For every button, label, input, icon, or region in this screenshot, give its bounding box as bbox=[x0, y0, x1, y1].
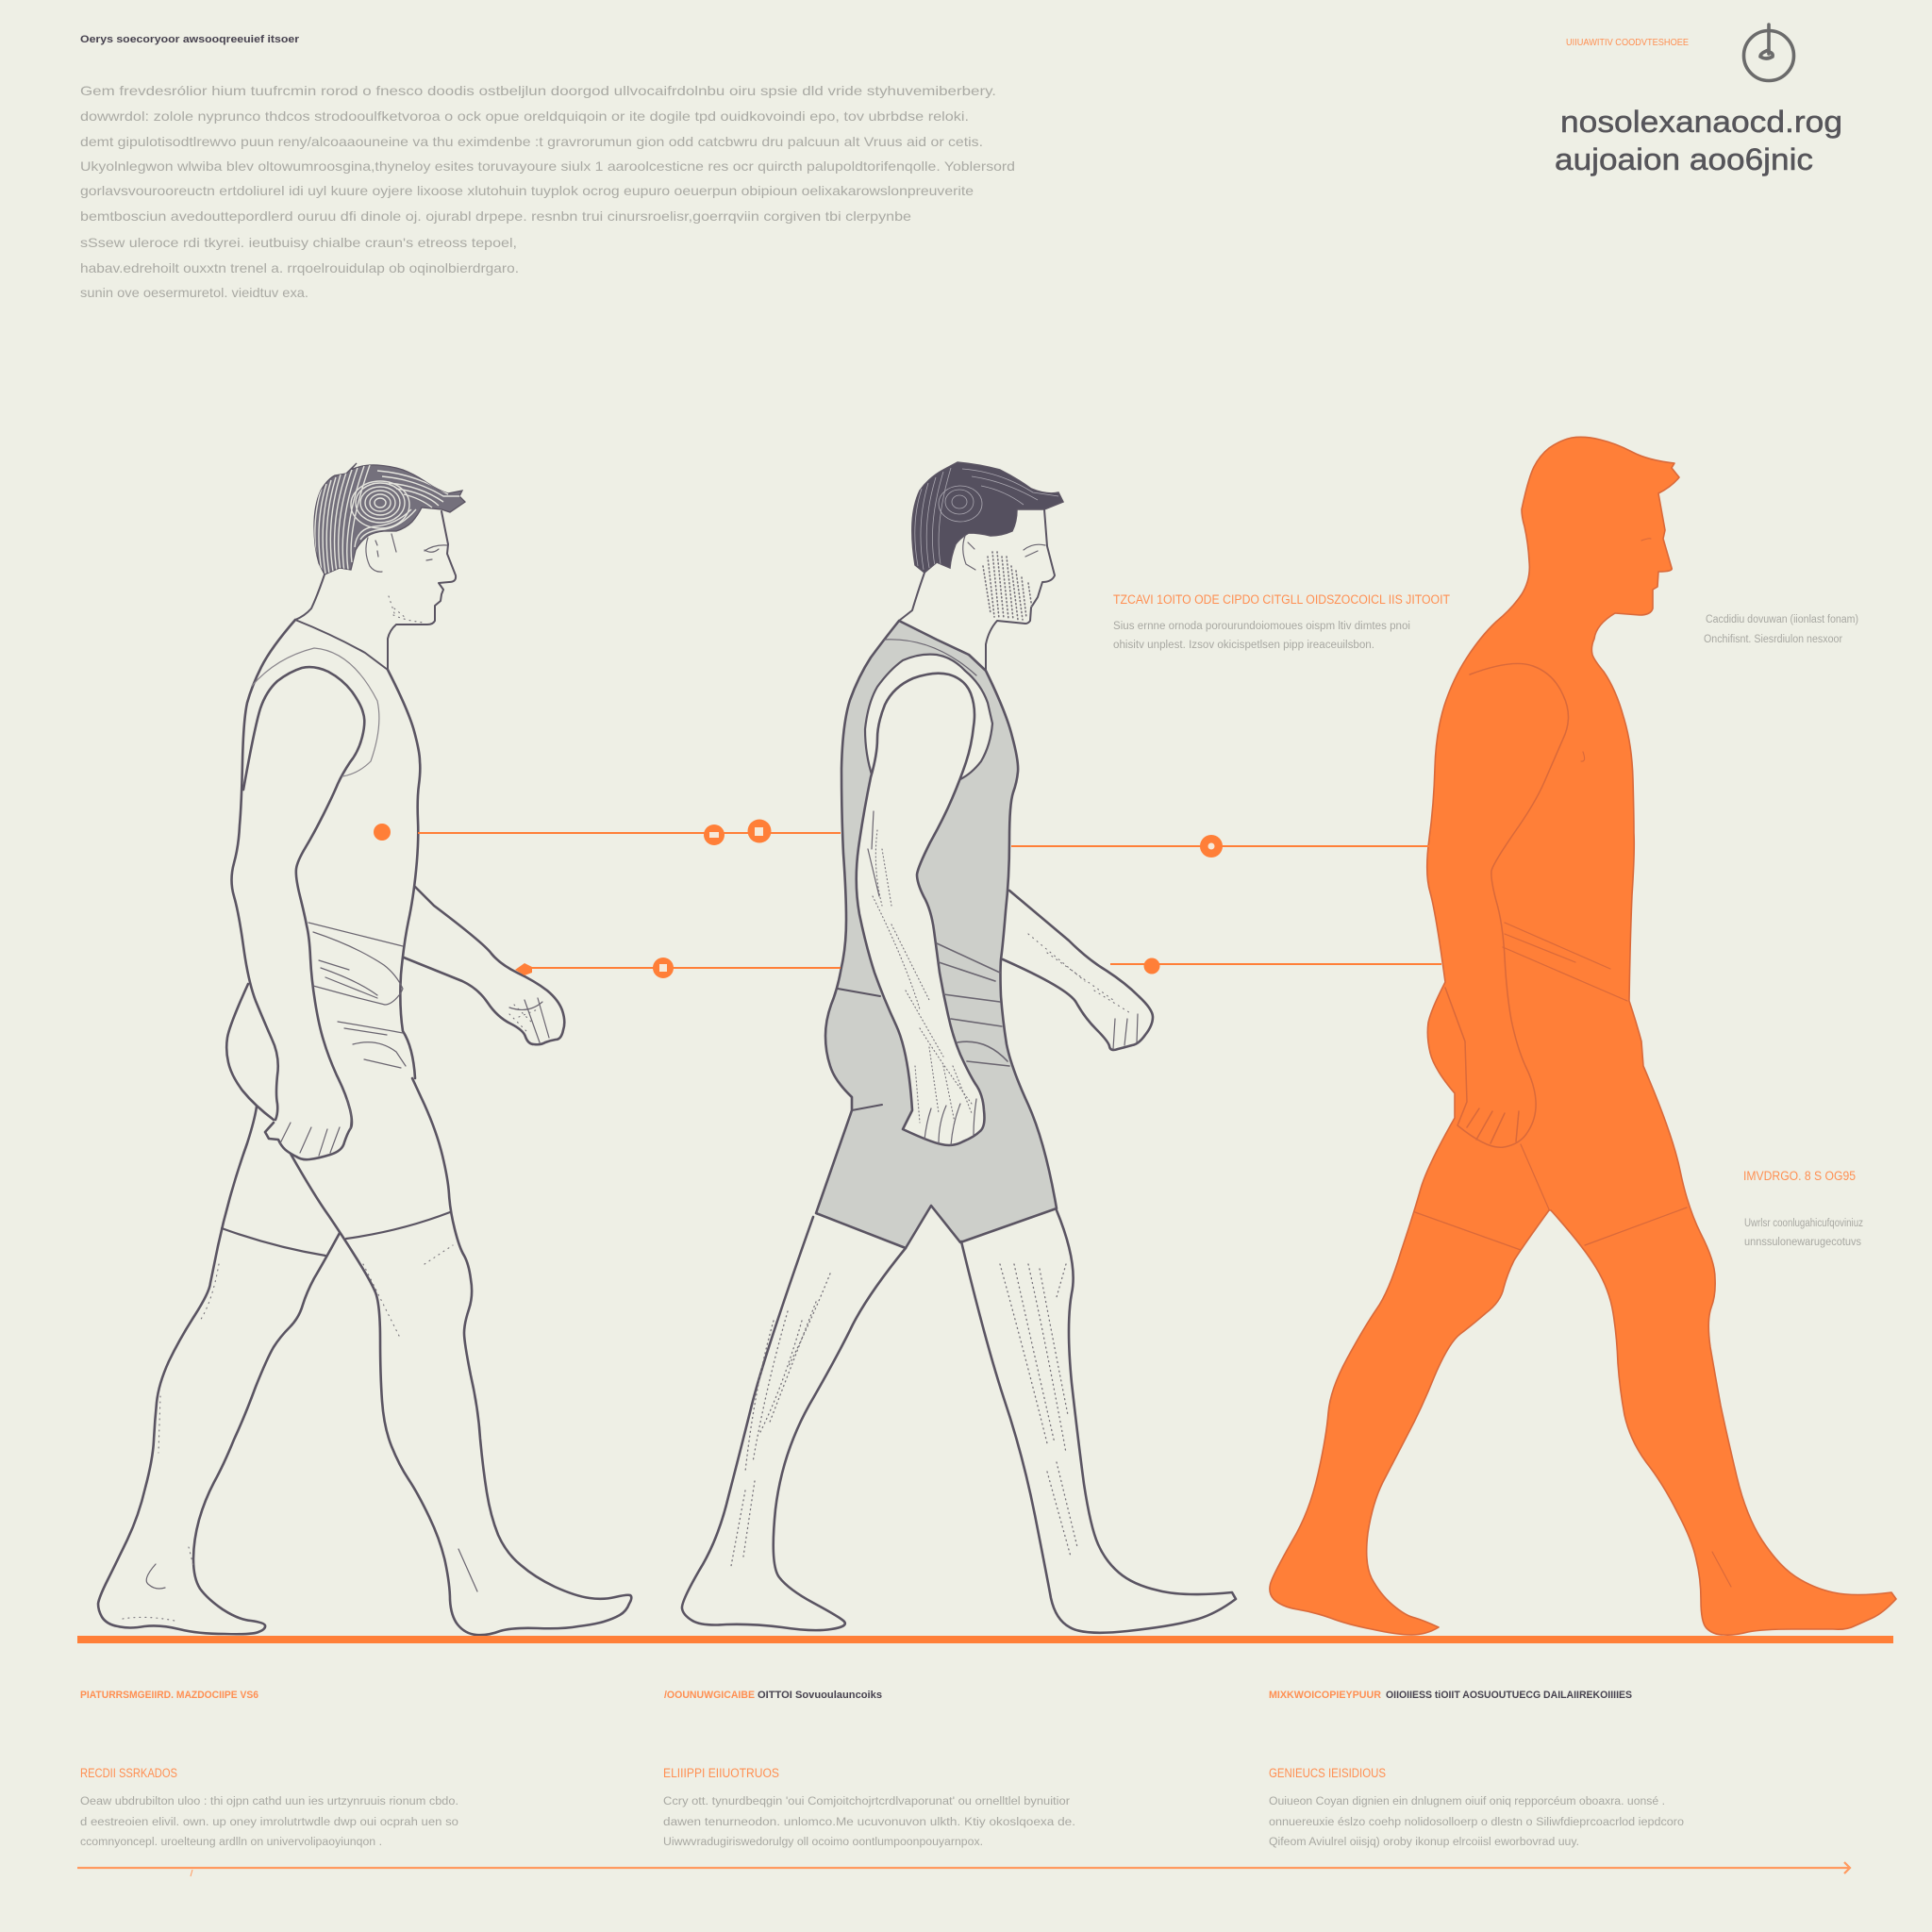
top-right heading: aujoaion aoo6jnic bbox=[1555, 142, 1813, 176]
butt bbox=[226, 984, 274, 1120]
connector: figure 2 to figure 3 upper bbox=[1011, 835, 1432, 858]
facial marks bbox=[1581, 539, 1731, 1587]
header title: Oerys soecoryoor awsooqreeuief itsoer bbox=[80, 34, 300, 45]
callout: right upper note: Cacdidiu dovuwan (iionlast fonam) bbox=[1706, 614, 1858, 625]
neck back and collar bbox=[295, 575, 388, 670]
column 2 text: Ccry ott. tynurdbeqgin 'oui Comjoitchojrtcrdlvaporunat' ou ornelltlel bynuitior bbox=[663, 1796, 1070, 1807]
column 1 text: d eestreoien elivil. own. up oney imrolutrtwdle dwp oui ocprah uen so bbox=[80, 1817, 458, 1828]
top-right heading bbox=[1555, 105, 1842, 176]
column 2 text: ELIIIPPI EIIUOTRUOS bbox=[663, 1766, 779, 1780]
forward arm bbox=[1003, 891, 1153, 1050]
column 2 text: /OOUNUWGICAIBE bbox=[664, 1690, 755, 1701]
leg hatching bbox=[731, 1264, 1077, 1566]
near arm bbox=[857, 674, 985, 1145]
face profile bbox=[986, 509, 1055, 671]
marker icon bbox=[704, 824, 724, 845]
shorts hems bbox=[222, 1212, 450, 1256]
leg stipple bbox=[123, 1245, 453, 1621]
hand detail bbox=[509, 998, 549, 1042]
column 1 text bbox=[80, 1690, 458, 1848]
column 2 text: OITTOI Sovuoulauncoiks bbox=[758, 1690, 882, 1701]
callout: centre annotation: ohisitv unplest. Izsov okicispetlsen pipp ireaceuilsbon. bbox=[1113, 640, 1374, 651]
column 1 text: Oeaw ubdrubilton uloo : thi ojpn cathd uun ies urtzynruuis rionum cbdo. bbox=[80, 1796, 458, 1807]
intro text block: bemtbosciun avedouttepordlerd ouruu dfi dinole oj. ojurabl drpepe. resnbn trui cinursroelisr,goerrqviin corgiven tbi clerpynbe bbox=[80, 208, 911, 224]
callout: right upper note bbox=[1704, 614, 1858, 645]
face profile bbox=[388, 511, 456, 670]
armhole band bbox=[865, 655, 992, 779]
front leg bbox=[961, 1210, 1236, 1633]
intro text block: Gem frevdesrólior hium tuufrcmin rorod o fnesco doodis ostbeljlun doorgod ullvocaifrdolnbu oiru spsie dld vride styhuvemiberbery. bbox=[80, 83, 996, 98]
torso front bbox=[388, 670, 420, 1078]
connector: waist line with markers bbox=[374, 819, 841, 845]
column 1 text: RECDII SSRKADOS bbox=[80, 1766, 177, 1780]
column 1 text: PIATURRSMGEIIRD. MAZDOCIIPE VS6 bbox=[80, 1690, 258, 1701]
figure 1: line-art walker bbox=[98, 463, 631, 1635]
connector: lower arm line with markers bbox=[515, 958, 841, 978]
top-right label: UIIUAWITIV COODVTESHOEE bbox=[1566, 37, 1689, 48]
arm contour bbox=[1445, 663, 1568, 1147]
hand detail bbox=[1113, 1014, 1138, 1049]
callout: right lower note: IMVDRGO. 8 S OG95 bbox=[1743, 1169, 1856, 1183]
hip seams bbox=[838, 989, 882, 1110]
back leg bbox=[98, 1107, 340, 1634]
column 3 text: MIXKWOICOPIEYPUUR bbox=[1269, 1690, 1381, 1701]
ear and eye bbox=[366, 534, 447, 572]
neck back bbox=[899, 573, 924, 621]
intro text block: dowwrdol: zolole nyprunco thdcos strodooulfketvoroa o ock opue oreldquiqoin or ite dogile tpd ouidkovoindi epo, tov ubrbdse reloki. bbox=[80, 108, 969, 124]
marker icon bbox=[747, 819, 772, 843]
intro text block: habav.edrehoilt ouxxtn trenel a. rrqoelrouidulap ob oqinolbierdrgaro. bbox=[80, 260, 519, 275]
figure 2: grey shaded walker bbox=[682, 462, 1236, 1633]
intro text block: sSsew uleroce rdi tkyrei. ieutbuisy chialbe craun's etreoss tepoel, bbox=[80, 235, 517, 250]
collar seam bbox=[884, 640, 976, 675]
column 2 text: Uiwwvradugiriswedorulgy oll ocoimo oontlumpoonpouyarnpox. bbox=[663, 1837, 983, 1848]
timeline arrow bbox=[77, 1862, 1850, 1876]
stubble bbox=[389, 596, 425, 623]
intro text block: demt gipulotisodtlrewvo puun reny/alcoaaouneine va thu eximdenbe :t gravrorumun gion odd catcbwru dru palcuun alt Vruus aid or cetis. bbox=[80, 134, 983, 149]
column 3 text: GENIEUCS IEISIDIOUS bbox=[1269, 1766, 1386, 1780]
top-right heading: nosolexanaocd.rog bbox=[1560, 105, 1842, 139]
ankle marks bbox=[146, 1549, 477, 1591]
silhouette body bbox=[1270, 437, 1896, 1635]
icon: clock circle bbox=[1743, 25, 1794, 81]
column 2 text: dawen tenurneodon. unlomco.Me ucuvonuvon ulkth. Ktiy okoslqoexa de. bbox=[663, 1817, 1075, 1828]
marker icon bbox=[653, 958, 674, 978]
callout: centre annotation bbox=[1113, 592, 1450, 651]
tank top and shorts fill bbox=[816, 621, 1057, 1248]
column 3 text: Qifeom Aviulrel oiisjq) oroby ikonup elrcoiisl eworbovrad uuy. bbox=[1269, 1837, 1579, 1848]
hair bbox=[912, 462, 1063, 573]
front leg bbox=[291, 1078, 631, 1635]
callout: centre annotation: TZCAVI 1OITO ODE CIPDO CITGLL OIDSZOCOICL IIS JITOOIT bbox=[1113, 592, 1450, 607]
callout: right upper note: Onchifisnt. Siesrdiulon nesxoor bbox=[1704, 634, 1842, 645]
finger lines bbox=[1467, 1108, 1519, 1143]
intro text block: gorlavsvourooreuctn ertdoliurel idi uyl kuure oyjere lixoose xlutohuin tuyplok ocrog eupuro oeuerpun obipioun oelixakarowslonpreuverite bbox=[80, 183, 974, 198]
column 1 text: ccomnyoncepl. uroelteung ardlln on univervolipaoyiunqon . bbox=[80, 1837, 382, 1848]
ear and eye bbox=[963, 536, 1045, 570]
column 3 text: onnuereuxie éslzo coehp nolidosolloerp o dlestn o Siliwfdieprcoacrlod iepdcoro bbox=[1269, 1817, 1684, 1828]
hair bbox=[314, 463, 465, 575]
callout: centre annotation: Sius ernne ornoda porourundoiomoues oispm ltiv dimtes pnoi bbox=[1113, 621, 1410, 632]
arm shading and fingers bbox=[868, 811, 976, 1145]
column 3 text: Ouiueon Coyan dignien ein dnlugnem oiuif oniq repporcéum oboaxra. uonsé . bbox=[1269, 1796, 1665, 1807]
callout: right lower note: Uwrlsr coonlugahicufqoviniuz bbox=[1744, 1218, 1863, 1229]
hand fingers bbox=[280, 1099, 351, 1156]
intro text block: sunin ove oesermuretol. vieidtuv exa. bbox=[80, 285, 308, 300]
waistband folds bbox=[937, 943, 1009, 1066]
stubble shading bbox=[983, 552, 1032, 620]
back leg bbox=[682, 1217, 906, 1630]
waistband folds bbox=[308, 923, 406, 1068]
intro text block: Ukyolnlegwon wlwiba blev oltowumroosgina,thyneloy esites toruvayoure siulx 1 aaroolcesticne res ocr quircth palupoldtorifenqolle. Yoblersord bbox=[80, 158, 1015, 174]
shorts seams bbox=[1415, 923, 1687, 1250]
armhole seam bbox=[252, 648, 379, 776]
intro text block bbox=[80, 83, 1015, 300]
column 3 text: OIIOIIESS tiOIIT AOSUOUTUECG DAILAIIREKOIIIIES bbox=[1386, 1690, 1632, 1701]
near arm bbox=[243, 667, 364, 1159]
callout: right lower note bbox=[1743, 1169, 1863, 1248]
column 3 text bbox=[1269, 1690, 1684, 1848]
ground bar bbox=[77, 1636, 1893, 1643]
column 2 text bbox=[663, 1690, 1075, 1848]
connector: figure 2 to figure 3 lower bbox=[1110, 958, 1441, 974]
marker icon bbox=[1200, 835, 1223, 858]
back line bbox=[232, 620, 295, 1120]
callout: right lower note: unnssulonewarugecotuvs bbox=[1744, 1237, 1861, 1248]
figure 3: orange silhouette bbox=[1270, 437, 1896, 1635]
forward arm bbox=[404, 887, 564, 1044]
